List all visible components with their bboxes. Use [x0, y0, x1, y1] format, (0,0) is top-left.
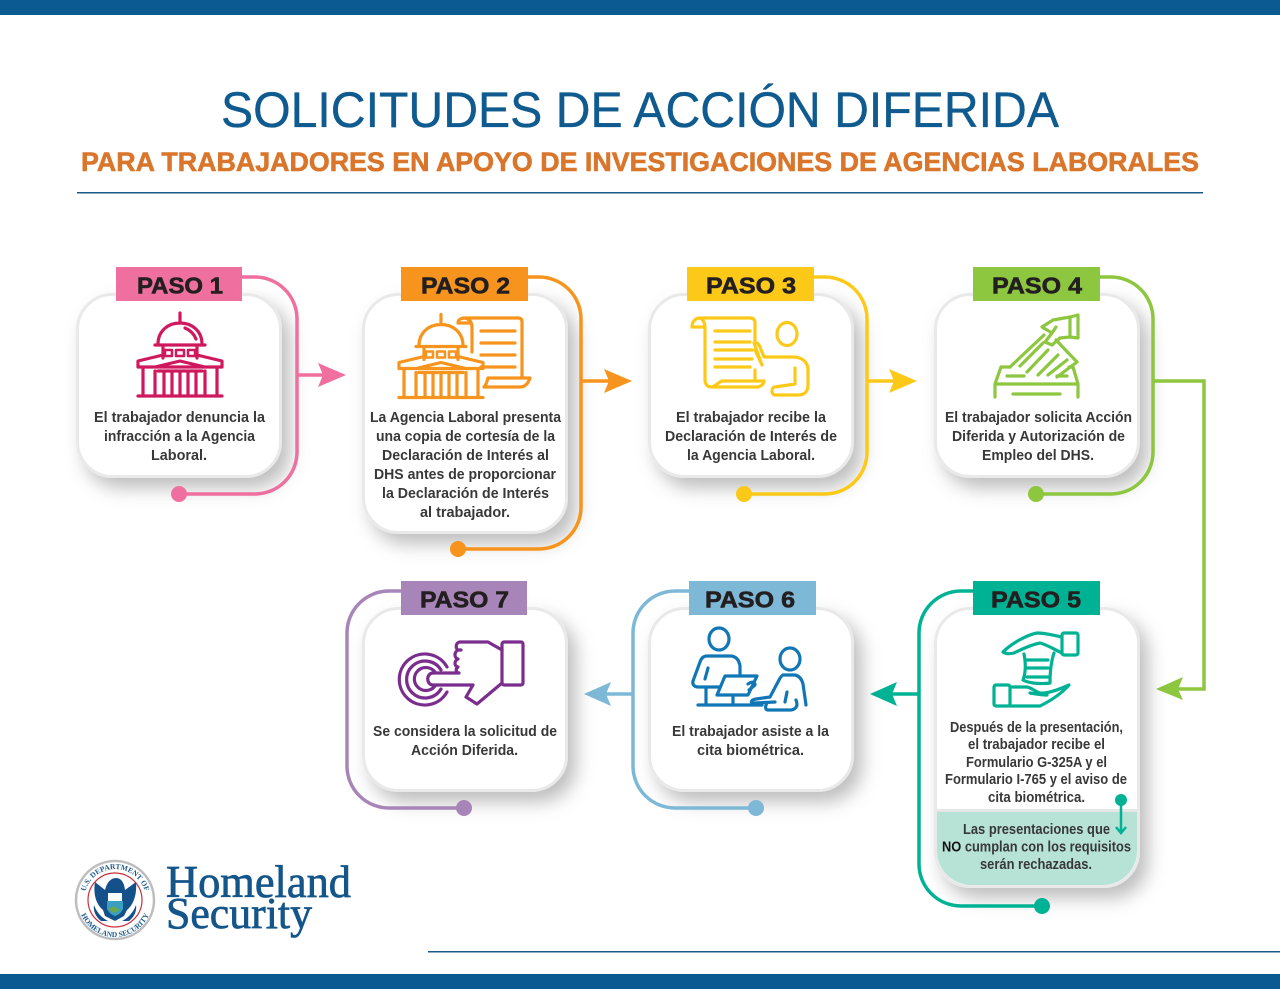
connector: paso 6: [633, 591, 764, 816]
text: paso 5: [945, 720, 1127, 806]
text: paso 6: [672, 724, 830, 759]
text: paso 4: El trabajador solicita Acción: [945, 410, 1132, 426]
text: paso 2: Declaración de Interés al: [382, 448, 549, 464]
text: paso 2: La Agencia Laboral presenta: [370, 410, 562, 426]
callout: rejected submissions: [942, 822, 1131, 873]
text: paso 4: Diferida y Autorización de: [952, 429, 1125, 445]
text: paso 3: El trabajador recibe la: [676, 410, 827, 426]
card: paso 4: [936, 294, 1138, 476]
text: paso 1: Laboral.: [151, 448, 207, 464]
icon: biometric appointment: [693, 628, 806, 710]
label: paso 1: [116, 267, 242, 301]
icon: worker with document: [692, 318, 808, 395]
panel: paso 2: [364, 267, 632, 557]
callout: rejected submissions: Las presentaciones que: [963, 822, 1110, 838]
subtitle: PARA TRABAJADORES EN APOYO DE INVESTIGACIONES DE AGENCIAS LABORALES: [81, 147, 1199, 177]
card: paso 3: [650, 294, 852, 476]
panel: paso 4: [936, 267, 1204, 700]
icon: capitol building: [138, 313, 222, 396]
card: paso 2: [364, 294, 566, 532]
label: paso 4: [973, 267, 1100, 301]
arrow: paso 1 to paso 2: [297, 363, 346, 387]
text: paso 7: Se considera la solicitud de: [373, 724, 557, 740]
text: paso 4: Empleo del DHS.: [982, 448, 1094, 464]
text: paso 1: infracción a la Agencia: [104, 429, 256, 445]
panel: paso 6: [584, 581, 852, 816]
connector: paso 5: [919, 591, 1050, 914]
label: paso 4: PASO 4: [992, 272, 1082, 298]
arrow: paso 5 to paso 6: [870, 682, 919, 706]
bottom bar: [0, 974, 1280, 989]
title: SOLICITUDES DE ACCIÓN DIFERIDA: [221, 82, 1060, 138]
connector: paso 4: [1028, 277, 1153, 502]
panel: paso 5: [870, 581, 1138, 914]
text: paso 2: la Declaración de Interés: [382, 486, 549, 502]
text: paso 5: cita biométrica.: [988, 790, 1085, 806]
text: paso 5: Después de la presentación,: [950, 720, 1123, 736]
text: paso 3: la Agencia Laboral.: [687, 448, 815, 464]
text: paso 7: Acción Diferida.: [411, 743, 518, 759]
logo: Homeland Security wordmark: [166, 857, 351, 938]
label: paso 3: PASO 3: [706, 272, 796, 298]
connector: paso 1: [171, 277, 297, 502]
text: paso 5: el trabajador recibe el: [968, 737, 1105, 753]
text: paso 3: Declaración de Interés de: [665, 429, 837, 445]
label: paso 7: PASO 7: [420, 586, 509, 612]
label: paso 7: [401, 581, 527, 615]
arrow: paso 2 to paso 3: [581, 369, 632, 393]
icon: ballot box: [995, 315, 1078, 397]
logo: Homeland Security wordmark: Homeland: [166, 857, 351, 907]
panel: paso 7: [347, 581, 566, 816]
logo: Homeland Security wordmark: Security: [166, 889, 312, 938]
label: paso 5: [973, 581, 1100, 615]
icon: finger pressing target: [399, 642, 523, 705]
callout: rejected submissions: NO cumplan con los requisitos: [942, 840, 1131, 856]
card: paso 7: [364, 608, 566, 790]
text: paso 7: [373, 724, 557, 759]
connector: paso 7: [347, 591, 472, 816]
label: paso 3: [687, 267, 814, 301]
text: paso 5: Formulario I-765 y el aviso de: [945, 772, 1127, 788]
top bar: [0, 0, 1280, 15]
text: paso 3: [665, 410, 837, 464]
panel: paso 3: [650, 267, 917, 502]
text: paso 2: [370, 410, 562, 521]
label: paso 1: PASO 1: [137, 272, 223, 298]
icon: hands holding document: [994, 633, 1078, 706]
label: paso 2: [401, 267, 528, 301]
card: paso 1: [78, 294, 280, 476]
card: paso 5: [936, 608, 1138, 886]
label: paso 5: PASO 5: [991, 586, 1081, 612]
logo: DHS seal: HOMELAND SECURITY: [81, 912, 148, 937]
note background: [937, 812, 1137, 885]
text: paso 1: El trabajador denuncia la: [94, 410, 266, 426]
arrow: paso 3 to paso 4: [867, 369, 917, 393]
text: paso 1: [94, 410, 266, 464]
panel: paso 1: [78, 267, 346, 502]
callout: rejected submissions: serán rechazadas.: [980, 857, 1092, 873]
arrow: paso 4 to paso 5: [1153, 381, 1204, 700]
card: paso 6: [650, 608, 852, 790]
text: paso 2: una copia de cortesía de la: [376, 429, 556, 445]
text: paso 2: DHS antes de proporcionar: [374, 467, 556, 483]
text: paso 4: [945, 410, 1132, 464]
label: paso 6: [689, 581, 816, 615]
logo: DHS seal: U.S. DEPARTMENT OF: [80, 864, 150, 890]
text: paso 6: El trabajador asiste a la: [672, 724, 830, 740]
icon: capitol with document: [399, 314, 530, 398]
text: paso 6: cita biométrica.: [697, 743, 804, 759]
connector: paso 3: [736, 277, 867, 502]
text: paso 2: al trabajador.: [420, 505, 510, 521]
logo: DHS seal: [74, 860, 156, 940]
arrow: paso 6 to paso 7: [584, 682, 633, 706]
text: paso 5: Formulario G-325A y el: [966, 755, 1107, 771]
label: paso 2: PASO 2: [421, 272, 510, 298]
arrow: note pointer: [1115, 794, 1127, 833]
label: paso 6: PASO 6: [705, 586, 795, 612]
connector: paso 2: [450, 277, 581, 557]
